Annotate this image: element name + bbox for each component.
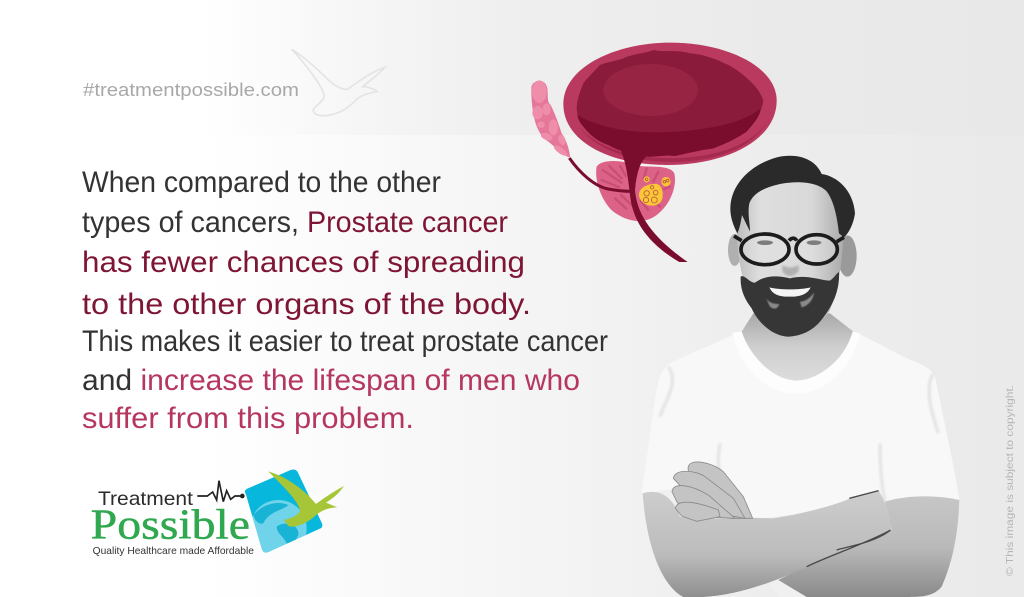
neck <box>742 313 853 381</box>
logo text: Treatment: Treatment <box>98 489 194 510</box>
hair <box>730 156 855 237</box>
logo icon: green bird <box>268 471 344 527</box>
tumour <box>639 176 671 206</box>
prostate illustration <box>531 43 777 262</box>
seminal vesicle <box>531 80 570 158</box>
text line 1: When compared to the other <box>82 166 441 199</box>
glasses <box>734 234 844 265</box>
text line 2: types of cancers, Prostate cancer <box>82 206 508 239</box>
logo icon: blue card <box>245 470 322 553</box>
logo text: Possible: Possible <box>91 501 250 548</box>
icon: bird outline watermark <box>292 49 385 116</box>
bladder lower rim shade <box>578 122 767 162</box>
shirt <box>642 332 959 597</box>
website tag: #treatmentpossible.com <box>83 80 299 100</box>
small tumour spot 1 <box>644 176 650 182</box>
bladder inner lining <box>577 50 763 157</box>
logo: Treatment Possible <box>91 470 344 557</box>
face <box>736 180 843 328</box>
text line 5: This makes it easier to treat prostate cancer <box>82 325 608 358</box>
forearm <box>643 491 891 597</box>
bladder highlight <box>603 64 698 116</box>
prostate gland <box>596 161 675 221</box>
text line 3: has fewer chances of spreading <box>82 246 525 279</box>
logo icon: heartbeat dot <box>240 494 245 498</box>
beard <box>741 272 839 337</box>
ear left <box>728 234 741 266</box>
ejaculatory duct <box>569 158 632 191</box>
bladder lower dark area <box>577 108 761 157</box>
right upper arm <box>778 496 959 597</box>
urethra <box>620 148 688 262</box>
nose shadow <box>782 265 799 276</box>
chin skin patches <box>766 293 814 309</box>
logo tagline: Quality Healthcare made Affordable <box>93 546 254 557</box>
logo icon: globe <box>252 500 307 552</box>
eyes <box>757 240 821 245</box>
ear right <box>838 235 857 277</box>
collar <box>733 332 860 393</box>
man photo <box>642 156 959 597</box>
text line 7: suffer from this problem. <box>82 402 414 435</box>
fingers <box>672 462 753 521</box>
copyright note: © This image is subject to copyright. <box>1004 385 1016 576</box>
teeth <box>769 287 811 297</box>
text line 4: to the other organs of the body. <box>82 288 531 321</box>
text line 6: and increase the lifespan of men who <box>82 364 580 397</box>
main text <box>82 166 608 435</box>
logo icon: heartbeat line <box>197 481 242 502</box>
small tumour spot 2 <box>661 177 671 186</box>
bladder outer wall <box>563 43 777 165</box>
arm crease <box>807 491 891 567</box>
